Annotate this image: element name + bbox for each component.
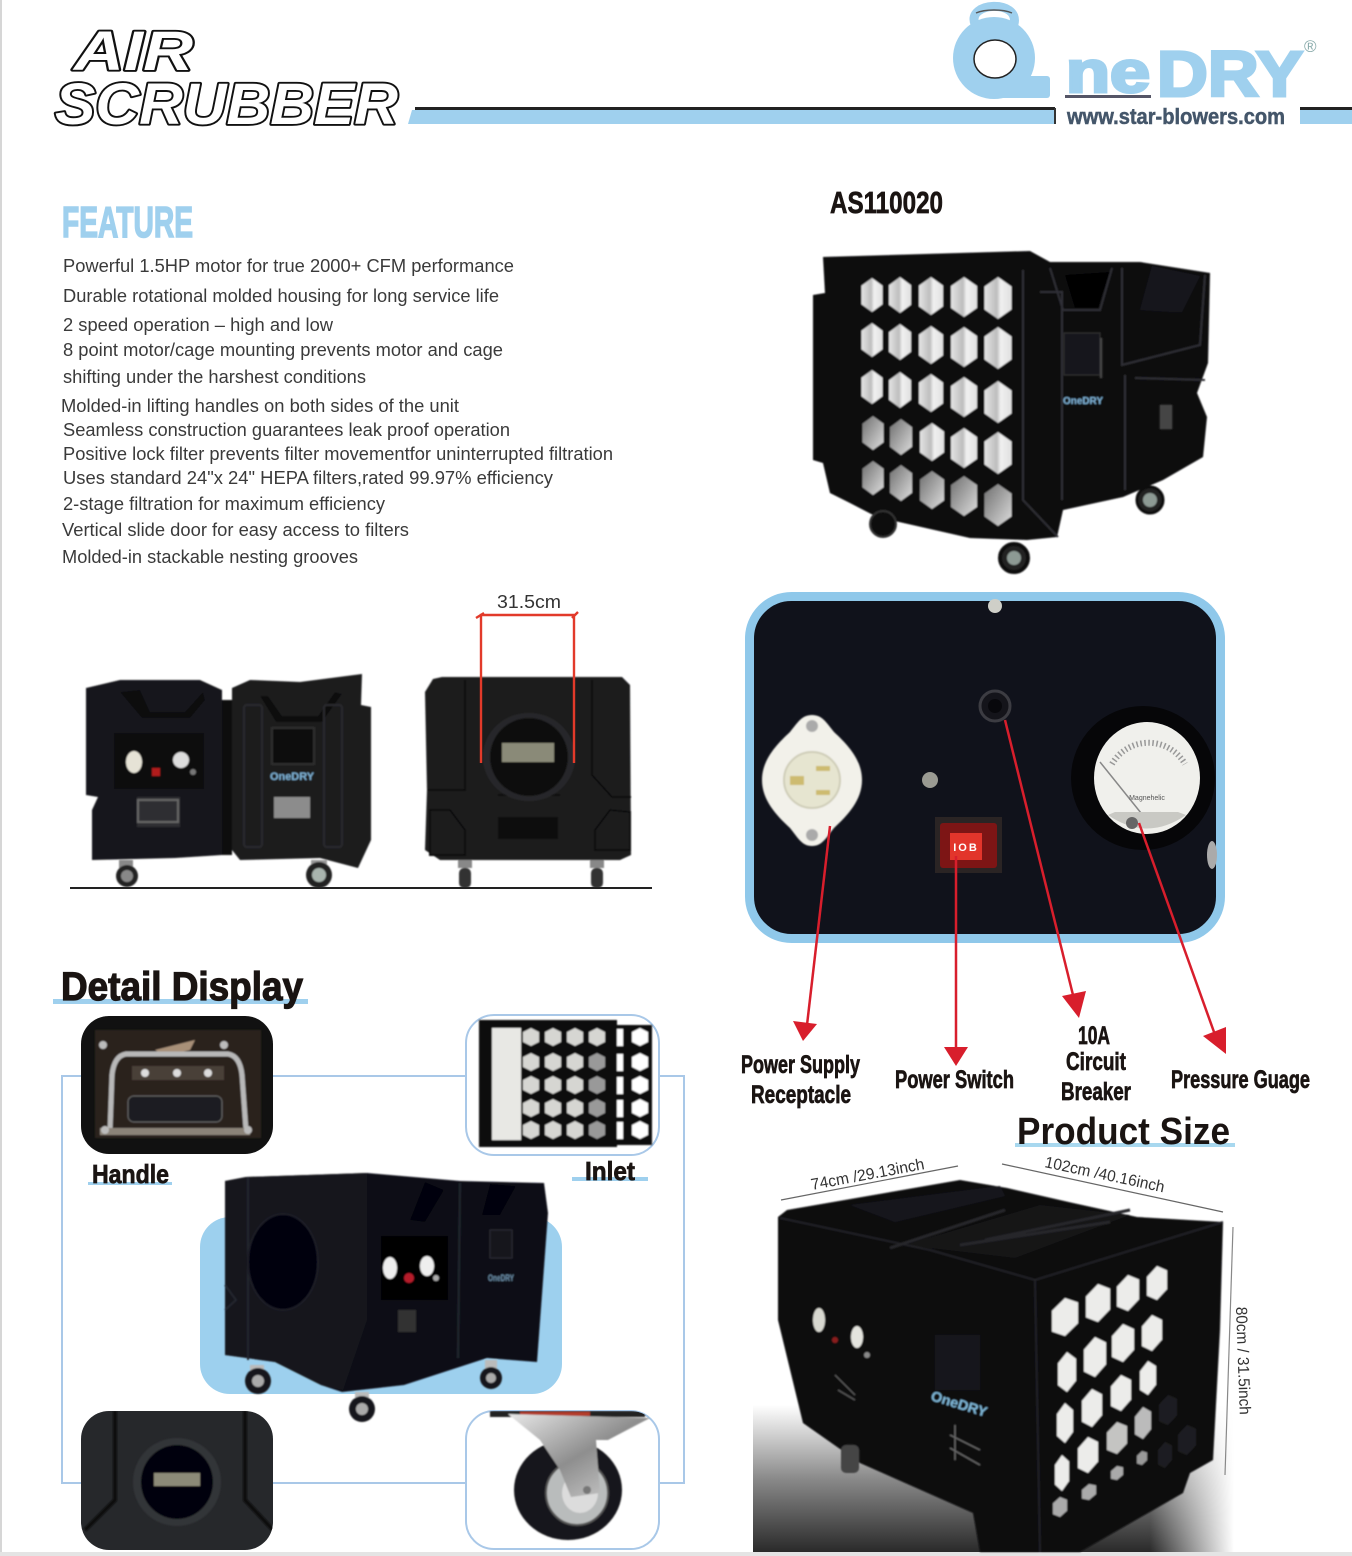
dimension: length — [1002, 1154, 1223, 1212]
unit logo badge: OneDRY — [929, 1388, 990, 1420]
casters — [116, 860, 332, 888]
floor shadow — [753, 1405, 1264, 1552]
title: Air Scrubber — [55, 19, 398, 137]
icon: pressure gauge — [1071, 706, 1215, 850]
panel: control panel close-up — [750, 596, 1220, 938]
feature list — [61, 256, 613, 567]
heading: product size: Product Size — [1017, 1111, 1230, 1153]
control plate — [381, 1236, 448, 1300]
detail frame line — [62, 1076, 684, 1483]
feature list: 2-stage filtration for maximum efficiency — [63, 494, 385, 514]
unit logo badge: OneDRY — [1063, 396, 1103, 407]
callout labels: 10A — [1078, 1022, 1110, 1050]
product photo: front three-quarter — [813, 251, 1210, 572]
dimension label: 31.5cm — [497, 592, 561, 612]
callout labels: Breaker — [1061, 1078, 1131, 1106]
icon: circuit breaker — [980, 691, 1010, 721]
casters — [870, 487, 1163, 572]
dimension: length: 102cm /40.16inch — [1043, 1154, 1166, 1196]
label: handle: Handle — [92, 1159, 169, 1189]
front view of unit with width dimension — [425, 592, 631, 888]
thumbnail: handle — [81, 1016, 273, 1154]
icon: power switch: IOB — [953, 842, 979, 854]
side view of unit — [86, 674, 371, 888]
hexagonal filter grille — [1052, 1263, 1196, 1519]
heading: detail display: Detail Display — [61, 965, 304, 1009]
feature list: Vertical slide door for easy access to filters — [62, 520, 409, 540]
control plate — [114, 733, 204, 789]
label: inlet: Inlet — [585, 1156, 635, 1186]
icon: pressure gauge: Magnehelic — [1129, 795, 1165, 802]
thumbnail: air outlet — [81, 1411, 273, 1550]
arrows — [793, 720, 1226, 1066]
wheel — [841, 1445, 859, 1473]
header rule — [408, 107, 1352, 124]
title: Air Scrubber: AIR — [72, 19, 194, 82]
feature list: shifting under the harshest conditions — [63, 367, 366, 387]
dimension: width: 74cm /29.13inch — [810, 1156, 926, 1194]
feature list: Powerful 1.5HP motor for true 2000+ CFM performance — [63, 256, 514, 276]
blue backdrop — [200, 1217, 562, 1394]
arrow to power switch — [944, 856, 968, 1066]
callout labels: Power Supply — [741, 1051, 860, 1079]
dimension: width — [781, 1156, 958, 1200]
title: Air Scrubber: SCRUBBER — [55, 72, 398, 137]
arrow to pressure gauge — [1139, 823, 1226, 1054]
logo wordmark: DRY — [1157, 38, 1303, 110]
website: www.star-blowers.com — [1066, 104, 1285, 129]
callout labels: Power Switch — [895, 1066, 1014, 1094]
feature list: Positive lock filter prevents filter movementfor uninterrupted filtration — [63, 444, 613, 464]
heading: feature: FEATURE — [62, 198, 193, 247]
dimension lines — [476, 612, 578, 763]
icon: logo O with handle — [953, 6, 1050, 99]
dimension: height — [1225, 1227, 1253, 1475]
product photo: center unit: OneDRY — [488, 1273, 514, 1283]
ground line — [70, 887, 652, 889]
arrow to power supply receptacle — [793, 826, 830, 1041]
housing details — [1023, 268, 1205, 537]
feature list: 2 speed operation – high and low — [63, 315, 334, 335]
logo wordmark: ne — [1066, 40, 1150, 105]
icon: power switch — [935, 817, 1002, 873]
thumbnail: inlet — [466, 1015, 659, 1155]
product photo: center unit — [225, 1173, 548, 1422]
product size photo with dimensions — [753, 1154, 1264, 1552]
icon: screws — [922, 599, 1217, 869]
feature list: Molded-in lifting handles on both sides of the unit — [61, 396, 459, 416]
unit body — [778, 1180, 1223, 1552]
feature list: Molded-in stackable nesting grooves — [62, 547, 358, 567]
callout labels: Circuit — [1066, 1048, 1127, 1076]
thumbnail: caster wheel — [466, 1411, 659, 1549]
side panel details — [225, 1178, 460, 1360]
icon: power receptacle — [762, 715, 862, 846]
hexagonal filter grille — [862, 277, 1012, 526]
callout labels: Receptacle — [751, 1081, 851, 1109]
feature list: Durable rotational molded housing for long service life — [63, 286, 499, 306]
round air outlet — [483, 713, 575, 801]
side view of unit: OneDRY — [270, 771, 315, 783]
model number: AS110020 — [830, 185, 943, 220]
casters — [245, 1360, 502, 1422]
dimension: height: 80cm / 31.5inch — [1232, 1307, 1253, 1415]
arrow to circuit breaker — [1005, 720, 1086, 1018]
round outlet — [248, 1214, 318, 1310]
logo wordmark: ® — [1304, 37, 1317, 56]
feature list: Seamless construction guarantees leak proof operation — [63, 420, 510, 440]
logo: OneDRY — [953, 6, 1317, 129]
control plate elements — [813, 1308, 870, 1358]
logo wordmark — [1065, 37, 1317, 110]
callout labels — [741, 1022, 1310, 1109]
feature list: Uses standard 24"x 24" HEPA filters,rated 99.97% efficiency — [63, 468, 553, 488]
feature list: 8 point motor/cage mounting prevents motor and cage — [63, 340, 503, 360]
